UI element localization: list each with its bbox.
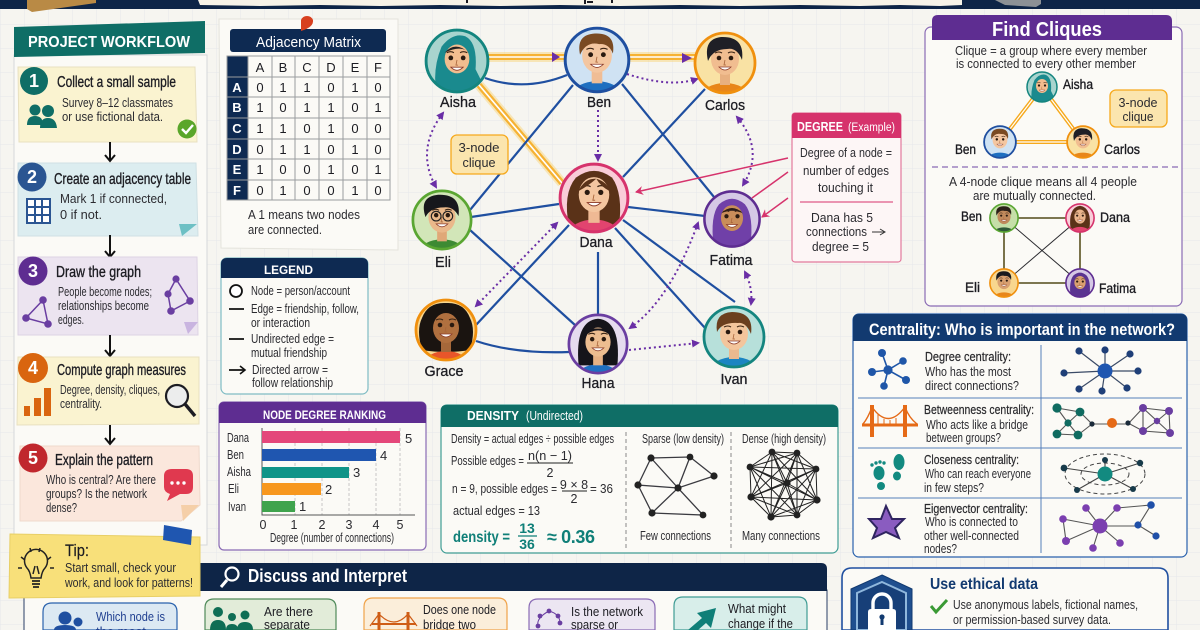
panel: legend: LEGEND	[264, 263, 313, 277]
closeness diagram	[1061, 454, 1145, 494]
matrix table: C	[302, 60, 312, 75]
bar chart: 1	[291, 518, 298, 532]
clique tag: 3-node	[1118, 95, 1158, 110]
row: degree centrality	[868, 346, 1142, 395]
node: Grace	[414, 298, 478, 362]
matrix table: 1	[303, 100, 311, 115]
step 4: centrality.	[60, 396, 102, 411]
matrix table: 1	[374, 162, 382, 177]
node labels: Aisha	[440, 94, 477, 111]
centrality heading	[853, 314, 1187, 341]
bar chart: 0	[260, 518, 267, 532]
tip note: Tip:	[65, 541, 89, 560]
panel: ethical data	[842, 568, 1168, 630]
icon: check	[931, 600, 947, 612]
icon: check	[178, 120, 196, 138]
bar chart: 2	[319, 518, 326, 532]
panel: legend: or interaction	[251, 316, 310, 330]
degree diagram	[1060, 346, 1142, 395]
degree callout: degree = 5	[812, 240, 869, 254]
icon: people	[27, 104, 57, 128]
row: eigenvector centrality: Eigenvector centrality:	[924, 501, 1028, 516]
metal clip corner	[995, 0, 1041, 7]
matrix table: 1	[327, 100, 335, 115]
pin	[301, 16, 313, 31]
icon: star	[869, 506, 904, 538]
card: which node: Which node is	[96, 609, 165, 624]
step 1	[18, 67, 197, 142]
density formula: n = 9, possible edges =	[452, 482, 557, 496]
bar chart: 3	[346, 518, 353, 532]
panel: find cliques: are mutually connected.	[973, 188, 1096, 203]
density formula: 9 × 8	[560, 478, 588, 492]
arrow 4 to 5	[105, 425, 115, 444]
icon: table grid	[27, 199, 50, 223]
4-node clique diagram: Fatima	[1099, 281, 1136, 296]
clique highlighted edges	[479, 57, 696, 183]
matrix table: 1	[303, 142, 311, 157]
card: bridge: Does one node	[423, 602, 496, 617]
step 1: Collect a small sample	[57, 74, 176, 91]
step 5	[18, 444, 200, 521]
node: Ivan	[702, 306, 766, 368]
node labels: Ben	[587, 94, 611, 111]
matrix table: 1	[279, 142, 287, 157]
node: Fatima	[704, 191, 760, 247]
avatar Eli	[989, 268, 1019, 298]
sparse graph: Sparse (low density)	[642, 432, 724, 446]
panel: density: DENSITY	[467, 408, 519, 423]
node labels: Dana	[580, 234, 613, 251]
step 5: Who is central? Are there	[46, 472, 156, 487]
avatar Ben green	[989, 203, 1019, 233]
bar chart: Degree (number of connections)	[270, 531, 394, 545]
matrix table: E	[351, 60, 360, 75]
card: bridge	[364, 598, 507, 630]
matrix table: 0	[351, 100, 359, 115]
node labels: Grace	[424, 363, 464, 380]
node: Eli	[412, 190, 472, 250]
matrix table: 0	[279, 100, 287, 115]
matrix table: 0	[256, 80, 264, 95]
node labels: Hana	[582, 375, 615, 392]
matrix table: 1	[256, 100, 264, 115]
degree callout: Dana has 5	[811, 211, 873, 225]
panel: discuss and interpret	[24, 563, 827, 630]
row: eigenvector centrality: Who is connected to	[925, 514, 1018, 529]
density formula: 2	[571, 492, 578, 506]
dotted purple arrows	[427, 52, 753, 350]
dense graph: Dense (high density)	[742, 432, 826, 446]
panel: ethical data: or permission-based survey data.	[953, 612, 1111, 627]
node: Dana	[558, 162, 630, 234]
matrix note	[248, 207, 360, 237]
panel: ethical data: Use anonymous labels, fictional names,	[953, 597, 1138, 612]
avatar Aisha	[1027, 72, 1057, 104]
betweenness diagram	[1052, 403, 1174, 439]
icon: small graph right	[164, 275, 194, 315]
step 2: 2	[27, 167, 37, 187]
dense graph: Many connections	[742, 529, 820, 543]
arrow 1 to 2	[105, 142, 115, 161]
workflow heading	[14, 21, 205, 57]
blue edges	[470, 75, 735, 352]
node labels: Ivan	[720, 371, 748, 388]
density formula	[451, 432, 614, 552]
density formula: n(n − 1)	[528, 448, 572, 463]
left rule	[24, 598, 26, 630]
node labels	[424, 94, 753, 392]
matrix table: 1	[279, 183, 287, 198]
avatar Ben	[983, 125, 1017, 159]
matrix table: 1	[279, 80, 287, 95]
row: degree centrality: direct connections?	[925, 378, 1019, 393]
card: what might change: What might	[728, 601, 786, 616]
title paper torn edge	[198, 0, 962, 6]
density formula: = 36	[590, 481, 613, 496]
icon: light bulb	[18, 548, 54, 587]
avatar Fatima	[1066, 269, 1094, 297]
arrow 2 to 3	[105, 235, 115, 257]
matrix table: 0	[256, 142, 264, 157]
row: betweenness centrality: between groups?	[926, 430, 1001, 445]
3-node clique diagram	[955, 72, 1167, 167]
matrix table: 0	[351, 121, 359, 136]
icon: bar chart	[24, 388, 51, 416]
cliques heading: Find Cliques	[992, 19, 1102, 41]
discuss heading: Discuss and Interpret	[248, 566, 407, 586]
matrix table: D	[232, 142, 242, 157]
density formula: 13	[519, 520, 535, 536]
density formula: density =	[453, 529, 510, 546]
panel: find cliques: is connected to every other member	[956, 56, 1137, 71]
bar chart: 5	[405, 431, 412, 446]
matrix table: 1	[351, 183, 359, 198]
step 2	[18, 162, 198, 236]
panel: centrality	[853, 314, 1187, 557]
panel: legend: Directed arrow =	[252, 363, 328, 377]
degree callout	[792, 113, 901, 262]
step 4: Degree, density, cliques,	[60, 382, 160, 397]
bar chart: 5	[397, 518, 404, 532]
matrix table: C	[232, 121, 242, 136]
4-node clique diagram	[961, 204, 1136, 306]
node labels: Fatima	[710, 252, 753, 269]
panel: legend: Undirected edge =	[251, 332, 334, 346]
bar chart: Dana	[227, 431, 249, 445]
step 5: 5	[28, 448, 38, 468]
panel: density: (Undirected)	[526, 409, 583, 423]
step 3: 3	[28, 261, 38, 281]
matrix table: 1	[279, 121, 287, 136]
arrow 3 to 4	[105, 335, 115, 356]
step 1: Survey 8–12 classmates	[62, 95, 173, 110]
3-node clique tag: clique	[462, 155, 496, 170]
matrix table: F	[374, 60, 382, 75]
density formula: actual edges = 13	[453, 503, 540, 518]
step 3: relationships become	[58, 298, 149, 313]
4-node clique diagram: Eli	[965, 280, 980, 295]
icon: small graph left	[22, 296, 52, 328]
step 5: dense?	[46, 500, 77, 515]
matrix table: 0	[303, 183, 311, 198]
eigenvector diagram	[1059, 501, 1160, 552]
step 3: edges.	[58, 312, 84, 327]
bar chart: 4	[380, 448, 387, 463]
row: betweenness centrality: Betweenness centrality:	[924, 402, 1034, 417]
dense graph	[742, 432, 826, 543]
row: closeness centrality: in few steps?	[924, 480, 984, 495]
3-node clique tag	[451, 135, 508, 174]
clique tag	[1110, 90, 1167, 127]
clipboard corner	[27, 0, 96, 12]
matrix table: 0	[374, 142, 382, 157]
matrix heading	[230, 29, 386, 52]
node: Hana	[568, 314, 628, 374]
panel: node degree ranking: NODE DEGREE RANKING	[263, 408, 386, 422]
matrix table: 0	[303, 121, 311, 136]
degree callout arrows	[636, 158, 788, 217]
step 5: groups? Is the network	[46, 486, 147, 501]
step 2: 0 if not.	[60, 207, 102, 222]
bar chart: Eli	[228, 482, 239, 496]
card: sparse or dense	[529, 599, 655, 630]
card: separate groups: Are there	[264, 604, 313, 619]
matrix table: A	[256, 60, 265, 75]
panel: density	[441, 405, 838, 553]
matrix table: B	[279, 60, 287, 75]
sparse graph	[634, 432, 724, 543]
matrix table: 1	[256, 162, 264, 177]
matrix note: A 1 means two nodes	[248, 207, 360, 222]
avatar Carlos	[1066, 125, 1100, 159]
card: which node	[43, 603, 177, 630]
panel: adjacency matrix	[219, 16, 398, 250]
3-node clique diagram: Carlos	[1104, 142, 1140, 157]
node: Carlos	[694, 32, 756, 94]
degree callout: DEGREE	[797, 119, 843, 134]
density formula: 2	[547, 466, 554, 480]
density formula: Density = actual edges ÷ possible edges	[451, 432, 614, 446]
matrix table	[227, 56, 390, 200]
tape	[163, 525, 192, 545]
step 4	[17, 353, 199, 425]
row: eigenvector centrality	[869, 501, 1160, 556]
bar chart	[227, 428, 415, 545]
row: eigenvector centrality: other well-connected	[924, 528, 1019, 543]
icon: hub	[868, 349, 910, 390]
bar chart: Ivan	[228, 500, 246, 514]
matrix table: 0	[327, 80, 335, 95]
node: Aisha	[426, 30, 488, 96]
row: closeness centrality: Closeness centrality:	[924, 452, 1019, 467]
row: eigenvector centrality: nodes?	[924, 541, 957, 556]
bar chart: 2	[325, 482, 332, 497]
step 4: Compute graph measures	[57, 362, 186, 379]
icon: shield	[851, 575, 912, 630]
bar chart: 1	[299, 499, 306, 514]
panel: ethical data: Use ethical data	[930, 576, 1038, 593]
icon: footprints	[870, 454, 904, 490]
matrix table: 0	[303, 162, 311, 177]
row: degree centrality: Degree centrality:	[925, 349, 1011, 364]
discuss heading	[200, 563, 827, 591]
density formula: 36	[519, 536, 535, 552]
panel: find cliques: A 4-node clique means all 4 people	[949, 174, 1137, 189]
3-node clique diagram: Ben	[955, 142, 976, 157]
bar chart: Aisha	[227, 465, 251, 479]
panel: legend	[221, 258, 368, 394]
matrix table: B	[232, 100, 242, 115]
avatar Dana	[1066, 204, 1094, 239]
matrix table: 1	[327, 162, 335, 177]
density formula: Possible edges =	[451, 454, 524, 468]
row: degree centrality: Who has the most	[925, 364, 1011, 379]
node labels: Carlos	[705, 97, 745, 114]
node: Ben	[564, 26, 630, 94]
matrix table: 1	[351, 80, 359, 95]
panel: legend: follow relationship	[252, 376, 333, 390]
tip note: Start small, check your	[65, 560, 177, 575]
degree callout: touching it	[818, 181, 874, 195]
density formula: ≈ 0.36	[547, 527, 595, 547]
tip note: work, and look for patterns!	[64, 575, 193, 590]
matrix table: A	[232, 80, 242, 95]
panel: legend: Edge = friendship, follow,	[251, 302, 359, 316]
matrix table: 1	[374, 100, 382, 115]
bar chart: 4	[373, 518, 380, 532]
matrix table: 0	[374, 80, 382, 95]
matrix table: F	[233, 183, 241, 198]
title descenders	[467, 0, 612, 4]
4-node clique diagram: Ben	[961, 209, 982, 224]
matrix table: 0	[327, 183, 335, 198]
matrix table: 0	[279, 162, 287, 177]
3-node clique tag: 3-node	[458, 140, 500, 155]
sparse graph: Few connections	[640, 529, 711, 543]
matrix note: are connected.	[248, 222, 322, 237]
step 4: 4	[28, 358, 38, 378]
matrix table: E	[233, 162, 242, 177]
matrix table: 1	[327, 121, 335, 136]
degree callout: connections	[806, 225, 867, 239]
icon: bridge	[862, 405, 918, 437]
step 3	[18, 256, 198, 335]
card: separate groups	[205, 599, 336, 630]
panel: find cliques: Clique = a group where every member	[955, 43, 1148, 58]
matrix table: 0	[327, 142, 335, 157]
matrix table: 0	[374, 121, 382, 136]
row: closeness centrality	[870, 452, 1145, 495]
row: betweenness centrality	[862, 402, 1174, 445]
panel: legend: Node = person/account	[251, 284, 350, 298]
4-node clique diagram: Dana	[1100, 210, 1130, 225]
degree callout: (Example)	[848, 122, 895, 134]
icon: magnifier	[166, 385, 195, 416]
bar chart: 3	[353, 465, 360, 480]
workflow heading: PROJECT WORKFLOW	[28, 34, 191, 51]
tip note	[9, 525, 200, 598]
matrix table: 0	[374, 183, 382, 198]
matrix table: 1	[351, 142, 359, 157]
panel: find cliques	[925, 15, 1182, 306]
card: what might change	[674, 597, 807, 630]
degree callout: Degree of a node =	[800, 146, 892, 160]
panel: project workflow	[14, 21, 207, 630]
row: closeness centrality: Who can reach everyone	[925, 466, 1031, 481]
clique tag: clique	[1122, 109, 1154, 124]
matrix table: 0	[256, 183, 264, 198]
matrix table: 1	[256, 121, 264, 136]
row: betweenness centrality: Who acts like a bridge	[926, 417, 1028, 432]
card: sparse or dense: Is the network	[571, 604, 643, 619]
node labels: Eli	[435, 254, 451, 271]
step 1: 1	[29, 71, 39, 91]
network graph	[413, 28, 901, 392]
step 3: Draw the graph	[56, 264, 141, 281]
step 2: Create an adjacency table	[54, 171, 191, 188]
top banner strip	[0, 0, 1200, 12]
matrix table: 1	[303, 80, 311, 95]
step 3: People become nodes;	[58, 284, 152, 299]
step 1: or use fictional data.	[62, 109, 163, 124]
matrix table: 0	[351, 162, 359, 177]
step 5: Explain the pattern	[55, 452, 153, 469]
bar chart: Ben	[227, 448, 244, 462]
icon: speech bubble	[164, 469, 193, 501]
matrix table: D	[326, 60, 336, 75]
cliques heading	[932, 15, 1172, 41]
matrix heading: Adjacency Matrix	[256, 35, 362, 51]
degree callout: number of edges	[803, 164, 889, 178]
3-node clique diagram: Aisha	[1063, 77, 1093, 92]
step 2: Mark 1 if connected,	[60, 191, 167, 206]
panel: legend: mutual friendship	[251, 346, 327, 360]
panel: node degree ranking	[219, 402, 426, 550]
